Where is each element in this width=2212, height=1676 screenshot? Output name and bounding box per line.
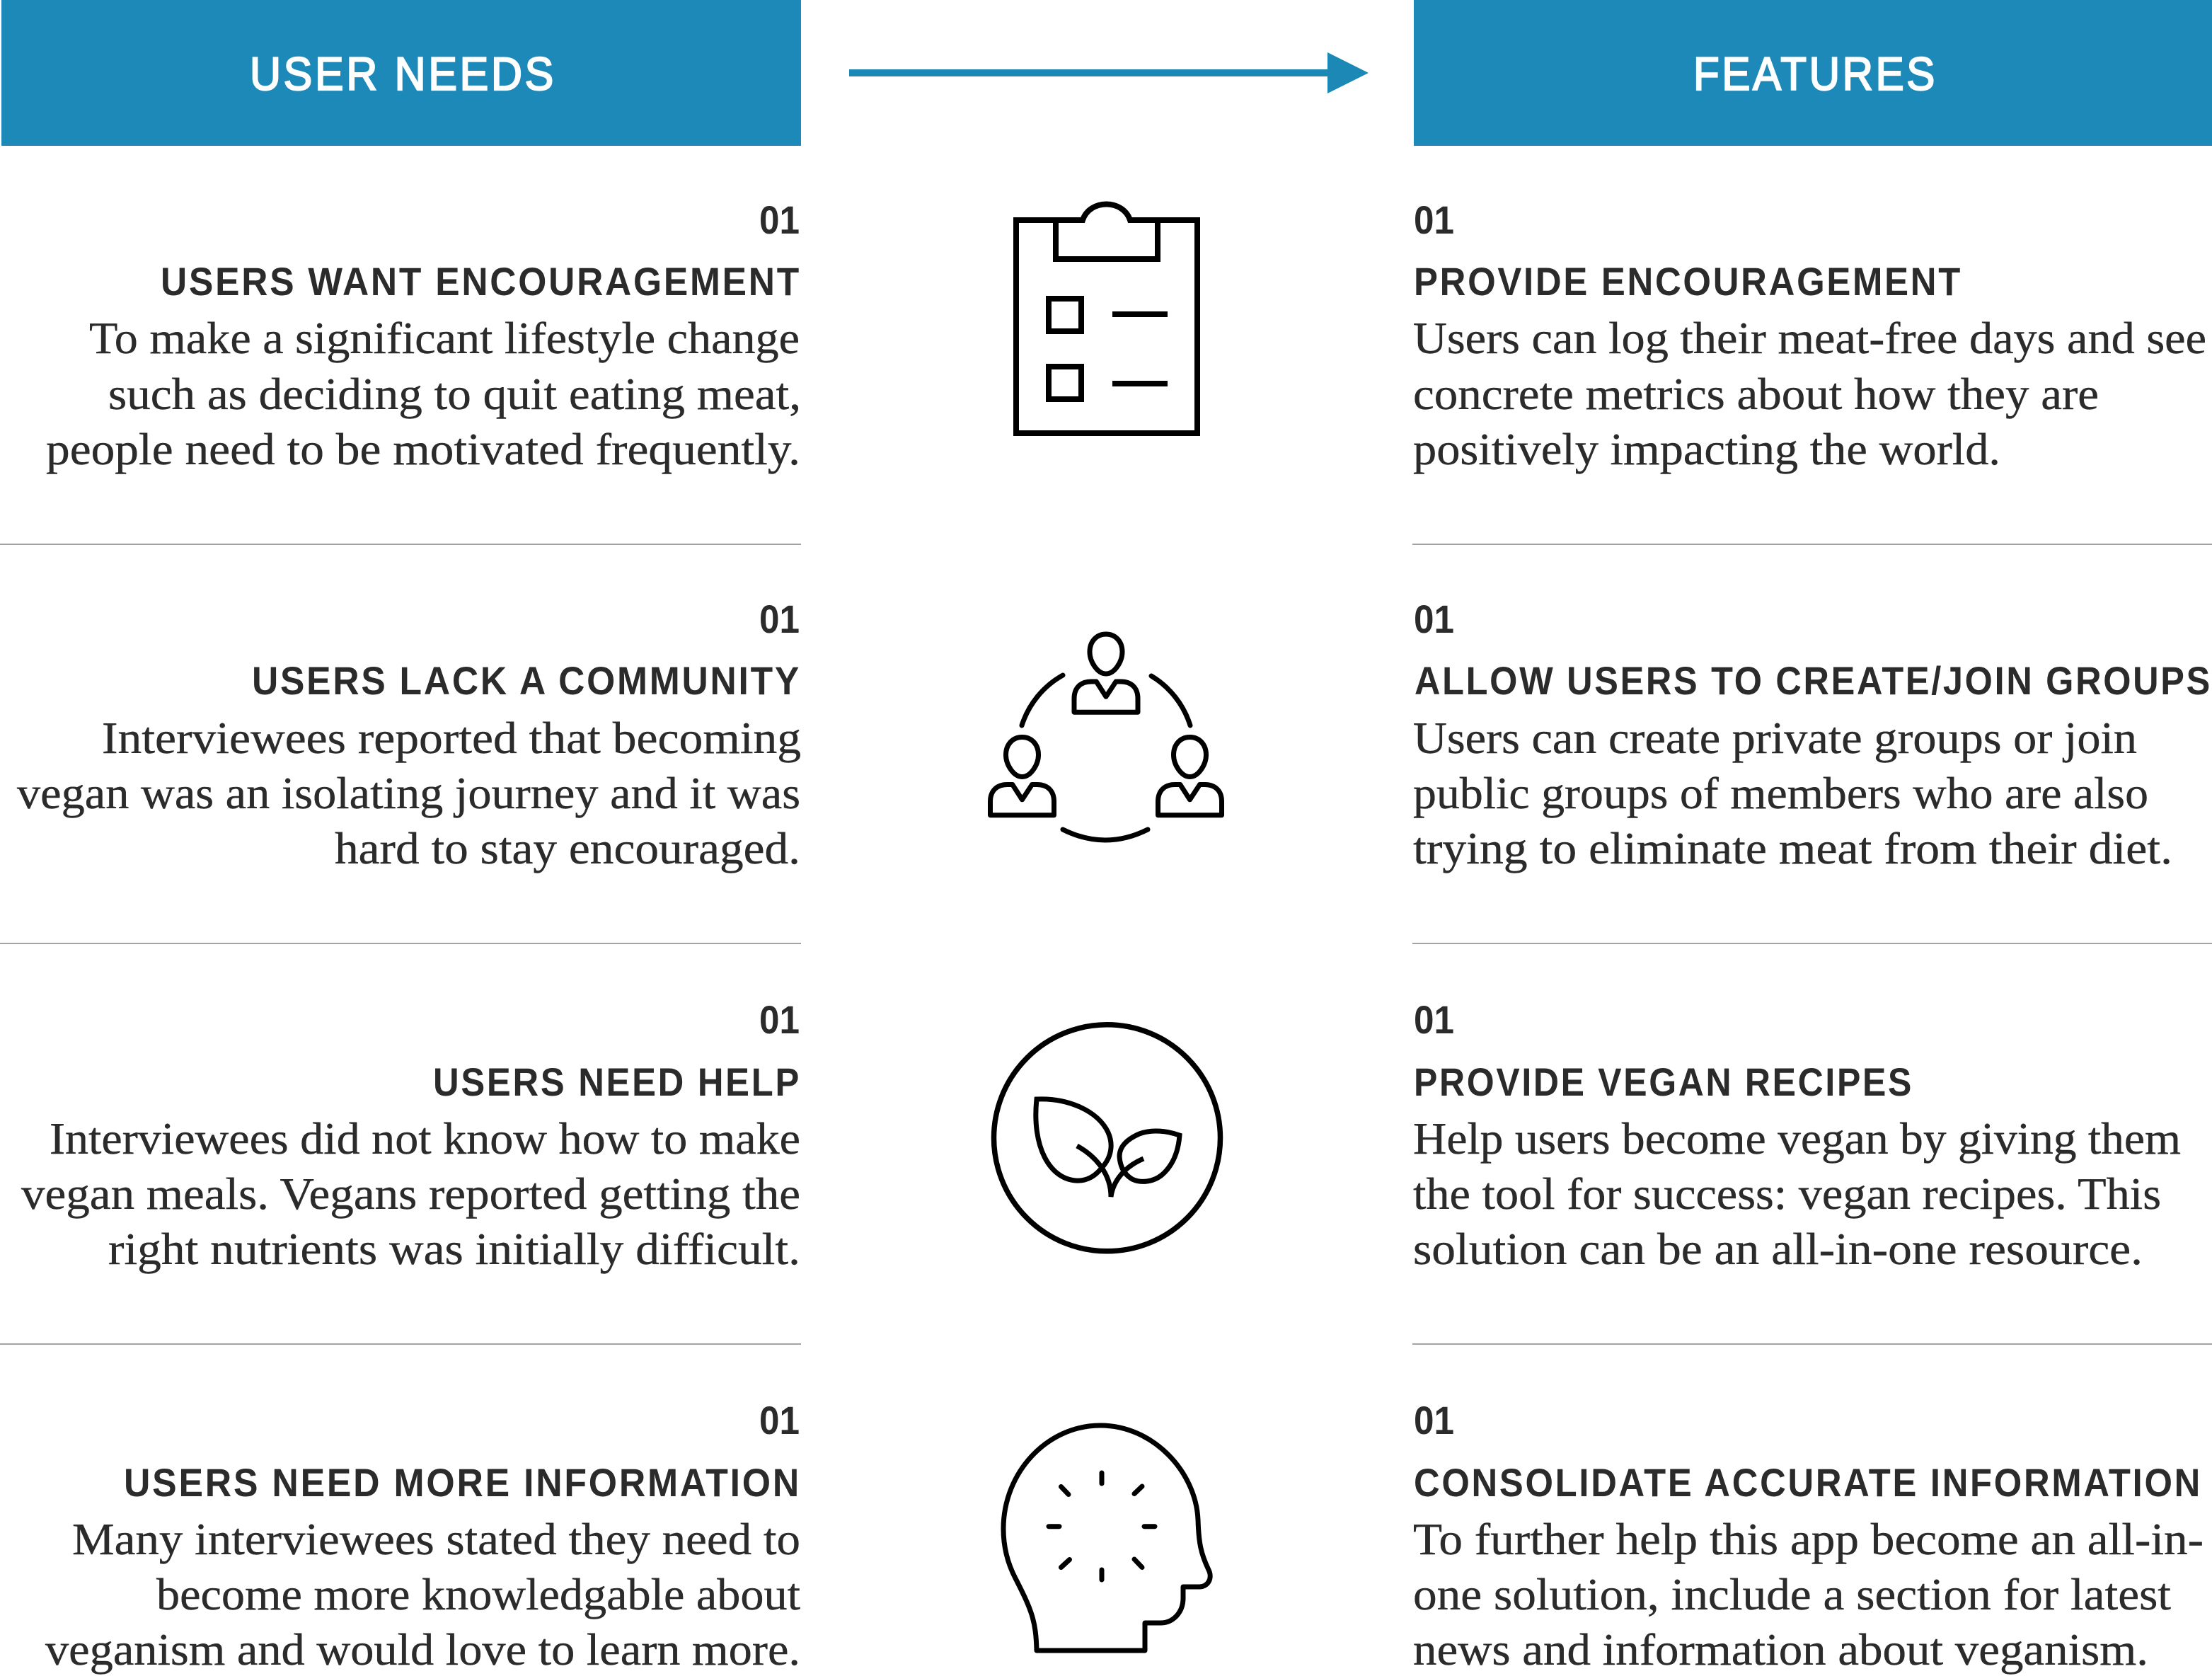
feature 2: allow users to create or join groups <box>1413 597 2212 873</box>
need 1: users want encouragement <box>46 197 801 474</box>
feature 1: provide encouragement: positively impacting the world. <box>1413 424 2000 474</box>
need 1: users want encouragement: people need to be motivated frequently. <box>46 424 800 474</box>
need 3: users need help: USERS NEED HELP <box>433 1060 801 1104</box>
icon: community of three people <box>991 634 1221 840</box>
feature 4: consolidate accurate information <box>1413 1398 2204 1675</box>
need 2: users lack a community: Interviewees reported that becoming <box>102 713 801 763</box>
need 2: users lack a community <box>17 597 801 873</box>
need 3: users need help: Interviewees did not know how to make <box>50 1113 800 1164</box>
header: user needs <box>1 0 801 146</box>
person: top <box>1074 634 1138 712</box>
feature 3: provide vegan recipes: the tool for success: vegan recipes. This <box>1413 1169 2161 1219</box>
need 2: users lack a community: vegan was an isolating journey and it was <box>17 768 800 818</box>
need 3: users need help: 01 <box>759 997 800 1042</box>
need 1: users want encouragement: 01 <box>759 197 800 242</box>
feature 4: consolidate accurate information: news and information about veganism. <box>1413 1624 2148 1675</box>
feature 2: allow users to create or join groups: Users can create private groups or join <box>1413 713 2137 763</box>
feature 4: consolidate accurate information: 01 <box>1414 1398 1454 1442</box>
feature 2: allow users to create or join groups: public groups of members who are also <box>1413 768 2148 818</box>
feature 2: allow users to create or join groups: trying to eliminate meat from their diet. <box>1413 823 2172 873</box>
need 2: users lack a community: 01 <box>759 597 800 641</box>
need 1: users want encouragement: To make a significant lifestyle change <box>89 313 800 363</box>
feature 3: provide vegan recipes: 01 <box>1414 997 1454 1042</box>
need 4: users need more information: USERS NEED MORE INFORMATION <box>124 1460 801 1505</box>
header: features: FEATURES <box>1693 47 1937 100</box>
need 2: users lack a community: hard to stay encouraged. <box>335 823 800 873</box>
feature 1: provide encouragement: PROVIDE ENCOURAGEMENT <box>1414 259 1962 304</box>
need 4: users need more information: 01 <box>759 1398 800 1442</box>
arc: bottom connector <box>1063 830 1148 840</box>
header: user needs: USER NEEDS <box>250 47 556 100</box>
need 4: users need more information: Many interviewees stated they need to <box>72 1514 800 1564</box>
feature 3: provide vegan recipes <box>1413 997 2181 1274</box>
need 2: users lack a community: USERS LACK A COMMUNITY <box>252 658 801 703</box>
feature 1: provide encouragement: concrete metrics about how they are <box>1413 369 2099 419</box>
icon: head with thought ticks <box>1003 1425 1210 1651</box>
need 3: users need help: vegan meals. Vegans reported getting the <box>21 1169 800 1219</box>
feature 2: allow users to create or join groups: 01 <box>1414 597 1454 641</box>
feature 1: provide encouragement <box>1413 197 2206 474</box>
need 4: users need more information: become more knowledgable about <box>156 1569 800 1619</box>
need 4: users need more information <box>45 1398 801 1675</box>
leaf: right <box>1119 1131 1180 1181</box>
icon: clipboard checklist <box>1016 204 1197 433</box>
icon: plant sprout in circle <box>993 1025 1220 1251</box>
feature 3: provide vegan recipes: PROVIDE VEGAN RECIPES <box>1414 1060 1913 1104</box>
person: left <box>991 737 1054 815</box>
leaf: left <box>1036 1099 1111 1181</box>
arrow: needs to features <box>849 52 1369 93</box>
feature 1: provide encouragement: Users can log their meat-free days and see <box>1413 313 2206 363</box>
need 3: users need help: right nutrients was initially difficult. <box>108 1224 800 1274</box>
feature 3: provide vegan recipes: solution can be an all-in-one resource. <box>1413 1224 2143 1274</box>
arc: right connector <box>1151 676 1190 725</box>
arc: left connector <box>1022 675 1063 725</box>
need 4: users need more information: veganism and would love to learn more. <box>45 1624 800 1675</box>
stem <box>1077 1146 1144 1197</box>
feature 4: consolidate accurate information: one solution, include a section for latest <box>1413 1569 2171 1619</box>
feature 4: consolidate accurate information: To further help this app become an all-in- <box>1413 1514 2204 1564</box>
person: right <box>1158 737 1221 815</box>
need 3: users need help <box>21 997 801 1274</box>
feature 3: provide vegan recipes: Help users become vegan by giving them <box>1413 1113 2181 1164</box>
feature 1: provide encouragement: 01 <box>1414 197 1454 242</box>
header: features <box>1414 0 2212 146</box>
need 1: users want encouragement: such as deciding to quit eating meat, <box>108 369 801 419</box>
need 1: users want encouragement: USERS WANT ENCOURAGEMENT <box>161 259 801 304</box>
